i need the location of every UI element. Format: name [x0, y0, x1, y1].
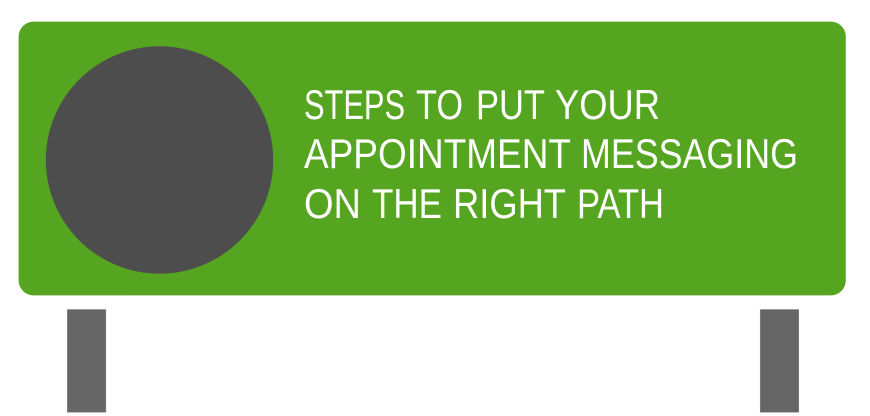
heading: RIGHT: [453, 180, 566, 227]
dark circle: [46, 46, 273, 274]
heading: [304, 81, 798, 227]
heading: STEPS: [304, 81, 405, 128]
heading: PUT: [476, 81, 545, 128]
heading: PATH: [577, 180, 664, 227]
heading: THE: [372, 180, 442, 227]
sign panel: [19, 22, 846, 295]
heading: APPOINTMENT: [304, 130, 571, 177]
heading: ON: [304, 180, 361, 227]
heading: YOUR: [555, 81, 660, 128]
right sign post: [760, 310, 799, 412]
left sign post: [67, 310, 106, 412]
heading: MESSAGING: [581, 130, 798, 177]
heading: TO: [416, 81, 463, 128]
